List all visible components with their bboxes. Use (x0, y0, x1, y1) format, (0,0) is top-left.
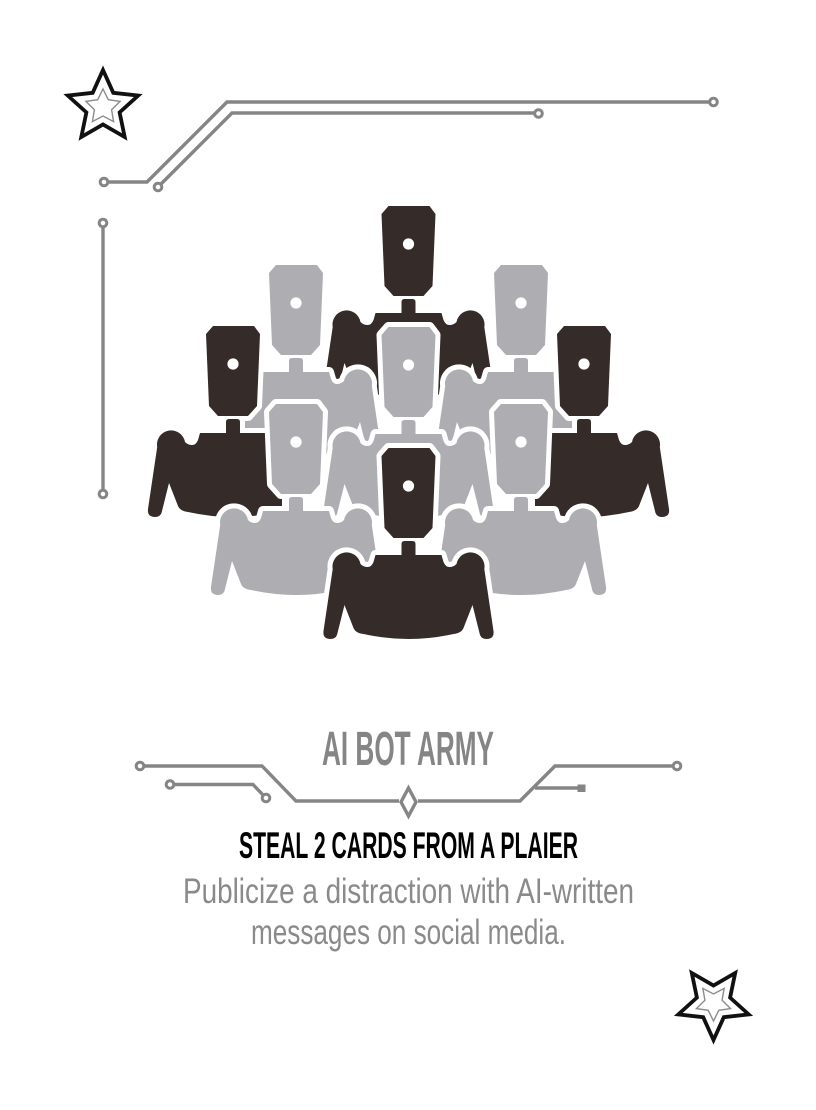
robot: left dark (148, 326, 318, 517)
robot: middle gray (323, 327, 494, 518)
robot: right dark (499, 326, 669, 517)
illustration: robot army (148, 206, 669, 639)
description text: messages on social media. (251, 913, 566, 952)
icon: star top left (68, 70, 138, 137)
description text: Publicize a distraction with AI-written (183, 872, 634, 911)
robot: top dark (323, 206, 494, 397)
robot: lower right gray (436, 404, 606, 595)
circuit divider (136, 762, 681, 816)
title: AI BOT ARMY (322, 723, 494, 776)
robot: upper left gray (211, 265, 381, 456)
robot: upper right gray (436, 265, 606, 456)
icon: star bottom right (678, 973, 749, 1040)
circuit line left (99, 219, 107, 498)
subtitle: STEAL 2 CARDS FROM A PLAIER (239, 825, 578, 866)
robot: lower left gray (211, 404, 381, 595)
description text (183, 872, 634, 952)
circuit lines top (100, 98, 717, 191)
robot: front dark (323, 448, 494, 639)
